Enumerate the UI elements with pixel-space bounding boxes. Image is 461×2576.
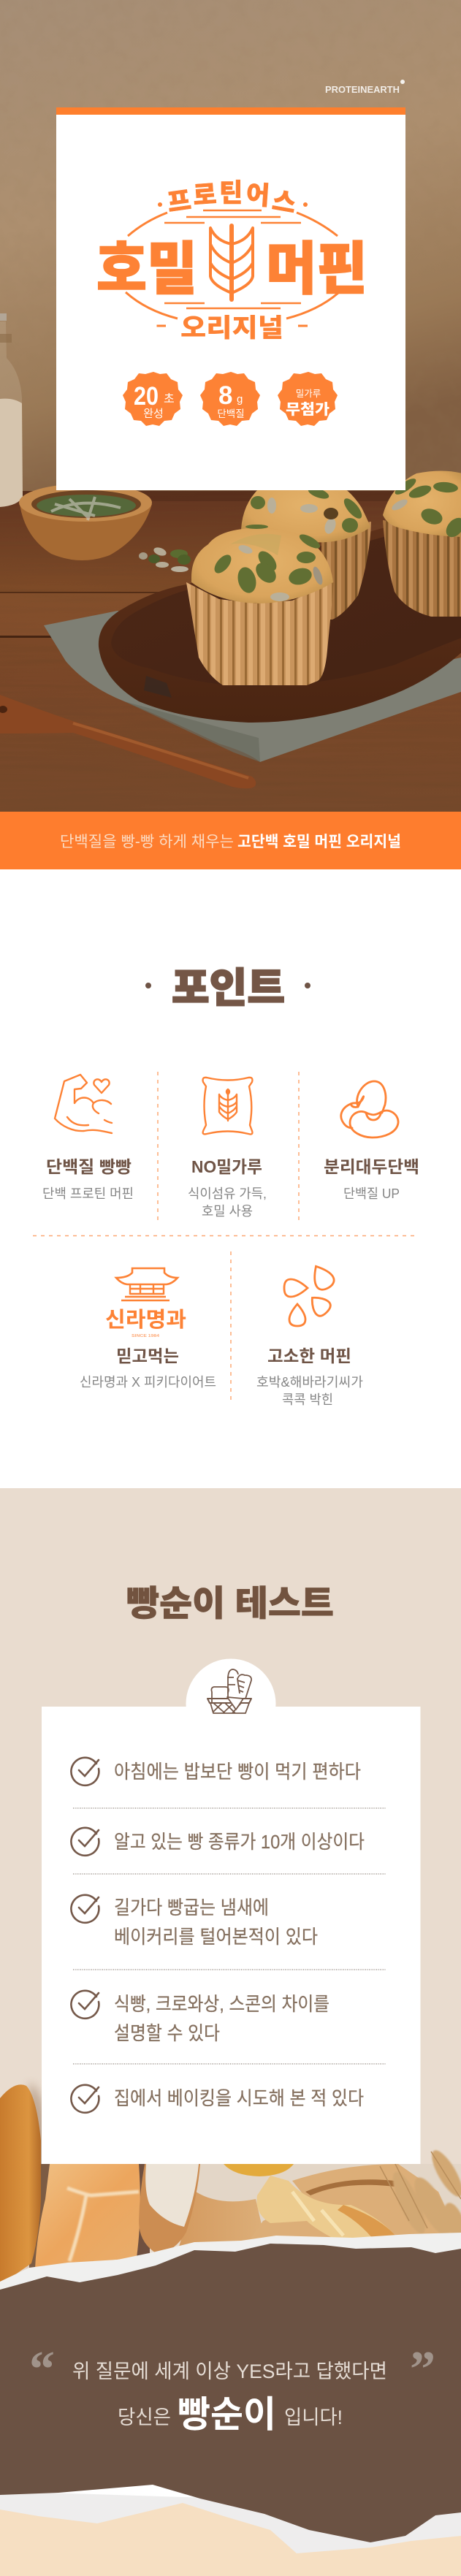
point: NO밀가루: 호밀 사용 (202, 1204, 253, 1219)
orange tagline band (0, 812, 461, 869)
checklist item 3: 베이커리를 털어본적이 있다 (114, 1926, 318, 1948)
checklist item 1 (71, 1758, 361, 1786)
torn white paper top (0, 2233, 461, 2294)
wheat ears (380, 2146, 461, 2242)
milk bottle (0, 313, 23, 507)
checklist item 2: 알고 있는 빵 종류가 10개 이상이다 (114, 1831, 365, 1853)
badge: 밀가루 무첨가 (278, 372, 338, 426)
wooden spoon (0, 695, 256, 788)
brand name: PROTEINEARTH (325, 84, 400, 95)
checklist item 4: 식빵, 크로와상, 스콘의 차이를 (114, 1993, 329, 2015)
point: 고소한 머핀: 고소한 머핀 (267, 1346, 351, 1365)
point: NO밀가루: NO밀가루 (191, 1157, 262, 1176)
grey napkin (44, 611, 461, 762)
front muffin seeds (211, 525, 324, 601)
icon: flour sack (203, 1078, 252, 1134)
point: 단백질 빵빵: 단백 프로틴 머핀 (42, 1186, 134, 1201)
shadow by left loaf (22, 2082, 48, 2265)
logo top word: 프로틴어스 (166, 179, 298, 218)
point: NO밀가루: 식이섬유 가득, (188, 1186, 267, 1201)
checklist item 4: 설명할 수 있다 (114, 2022, 220, 2044)
icon: soy beans (341, 1081, 398, 1138)
peach footer (0, 2499, 461, 2576)
badge: 밀가루 무첨가: 무첨가 (286, 401, 329, 418)
icon: flexed arm (55, 1075, 112, 1133)
logo wheat icon (210, 226, 253, 300)
brown message panel (0, 2244, 461, 2542)
point: 고소한 머핀 (256, 1262, 363, 1407)
checklist item 3: 길가다 빵굽는 냄새에 (114, 1897, 269, 1918)
quote mark left: “ (29, 2341, 55, 2398)
right muffin seeds (390, 476, 461, 541)
orange tagline band: 단백질을 빵-빵 하게 채우는 (60, 834, 234, 850)
right muffin (383, 470, 461, 617)
icon: 신라명과 logo (105, 1268, 186, 1338)
message line 2: 입니다! (284, 2407, 343, 2428)
wooden table (0, 491, 461, 812)
message line 2: 빵순이 (178, 2394, 276, 2435)
heading: 빵순이 테스트: 빵순이 테스트 (126, 1585, 334, 1623)
logo main word right: 머핀 (266, 237, 367, 301)
message line 2 (118, 2394, 343, 2435)
brand name (325, 80, 405, 95)
quote mark right: ” (410, 2341, 435, 2398)
quiz white card (42, 1658, 421, 2164)
scattered seeds (139, 546, 191, 572)
icon: 신라명과 logo: 신라명과 (105, 1308, 186, 1332)
honey dish (224, 2164, 294, 2176)
bakery photo strip (0, 2082, 461, 2285)
flour scoop (139, 2164, 200, 2261)
point: 단백질 빵빵 (42, 1075, 134, 1201)
bowl of seeds (19, 484, 152, 560)
left loaf (0, 2084, 41, 2285)
baguette (35, 2164, 140, 2268)
icon: seeds (284, 1262, 337, 1326)
badge: 밀가루 무첨가: 밀가루 (296, 389, 321, 399)
point: 단백질 빵빵: 단백질 빵빵 (46, 1157, 132, 1176)
logo arcs and lines (126, 210, 338, 326)
point: 분리대두단백 (324, 1081, 419, 1201)
checklist item 3 (71, 1895, 318, 1948)
checklist item 2 (71, 1828, 365, 1856)
logo bottom word: 오리지널 (180, 314, 283, 343)
back muffin seeds (246, 474, 365, 536)
white page background (0, 869, 461, 1490)
point: 믿고먹는: 신라명과 X 피키다이어트 (80, 1375, 216, 1390)
badge: 20초 완성: 20 (134, 382, 159, 411)
checklist item 4 (71, 1991, 329, 2044)
orange tagline band: 고단백 호밀 머핀 오리지널 (237, 834, 401, 850)
torn white paper bottom (0, 2491, 461, 2553)
front muffin (186, 525, 334, 685)
product logo (96, 179, 367, 343)
badge: 20초 완성 (123, 372, 183, 426)
badge: 8g 단백질: 단백질 (217, 408, 245, 419)
hero photo: muffins on wooden table (0, 0, 461, 812)
badge: 20초 완성: 초 (164, 392, 175, 405)
icon: 신라명과 logo: SINCE 1984 (132, 1334, 160, 1338)
point: 믿고먹는 (80, 1268, 216, 1390)
wall background (0, 0, 461, 492)
logo main word left: 호밀 (96, 237, 197, 301)
wooden boards (179, 2164, 461, 2247)
table surface beige (197, 2164, 461, 2244)
message line 1: 위 질문에 세계 이상 YES라고 답했다면 (72, 2360, 387, 2382)
dark wooden plate (99, 528, 461, 723)
heading: 포인트: 포인트 (172, 965, 285, 1011)
point: 분리대두단백: 단백질 UP (343, 1186, 400, 1201)
checklist item 5 (71, 2085, 364, 2113)
point: NO밀가루 (188, 1078, 267, 1219)
back muffin (241, 474, 371, 620)
white product card (56, 107, 405, 490)
beige test section background (0, 1488, 461, 2292)
message line 2: 당신은 (118, 2407, 171, 2428)
badge: 8g 단백질: g (237, 393, 243, 405)
checklist item 5: 집에서 베이킹을 시도해 본 적 있다 (114, 2087, 364, 2109)
badge: 20초 완성: 완성 (143, 408, 164, 420)
point: 분리대두단백: 분리대두단백 (324, 1157, 419, 1176)
badge: 8g 단백질 (200, 372, 260, 426)
checklist item 1: 아침에는 밥보단 빵이 먹기 편하다 (114, 1761, 361, 1783)
point: 믿고먹는: 믿고먹는 (116, 1346, 179, 1365)
badge: 8g 단백질: 8 (218, 381, 232, 410)
twisted pastry (256, 2176, 398, 2240)
heading: 포인트 (145, 965, 310, 1011)
point: 고소한 머핀: 콕콕 박힌 (282, 1392, 333, 1407)
icon: bread basket (207, 1669, 251, 1713)
point: 고소한 머핀: 호박&해바라기씨가 (256, 1375, 363, 1390)
